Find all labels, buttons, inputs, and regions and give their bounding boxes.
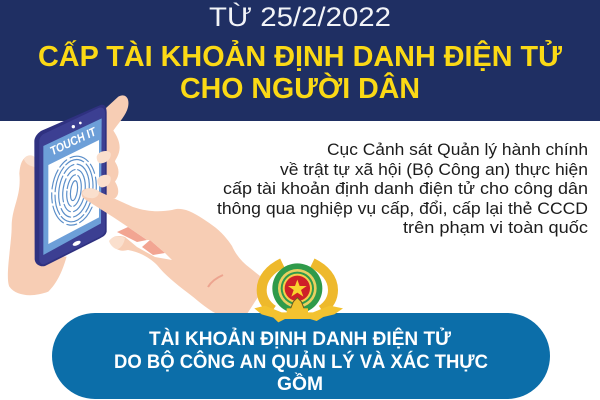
holding hand palm <box>8 155 67 295</box>
gold wheat wreath <box>262 263 333 310</box>
fingerprint <box>47 153 101 228</box>
date line: TỪ 25/2/2022 <box>209 2 391 32</box>
finger nails on far fingers <box>97 151 111 187</box>
gear base <box>290 298 305 310</box>
laurel band <box>278 269 317 308</box>
title <box>38 39 563 105</box>
title: CHO NGƯỜI DÂN <box>180 71 420 105</box>
pill text <box>114 326 488 395</box>
blue pill panel <box>52 313 550 399</box>
body text: về trật tự xã hội (Bộ Công an) thực hiện <box>280 160 588 179</box>
green ring <box>272 263 322 313</box>
body text: cấp tài khoản định danh điện tử cho công dân <box>223 179 588 198</box>
yellow ring <box>283 274 312 303</box>
body text: thông qua nghiệp vụ cấp, đổi, cấp lại thẻ CCCD <box>217 199 588 218</box>
illustration: pointing hand <box>82 188 260 314</box>
pill text: GỒM <box>277 371 323 395</box>
far fingers behind phone <box>97 95 128 198</box>
wrist crease <box>208 275 223 287</box>
body text: trên phạm vi toàn quốc <box>403 218 589 237</box>
red disc <box>285 276 310 301</box>
fingers behind <box>117 227 165 255</box>
body text <box>217 140 589 237</box>
illustration: hand holding phone <box>8 95 128 295</box>
pill text: DO BỘ CÔNG AN QUẢN LÝ VÀ XÁC THỰC <box>114 349 488 373</box>
title: CẤP TÀI KHOẢN ĐỊNH DANH ĐIỆN TỬ <box>38 39 563 73</box>
emblem <box>254 263 343 322</box>
hand shape <box>82 188 260 314</box>
star <box>288 280 307 297</box>
body text: Cục Cảnh sát Quản lý hành chính <box>327 140 588 159</box>
header band <box>0 0 600 121</box>
home button <box>72 240 81 247</box>
screen label: TOUCH IT <box>48 124 100 158</box>
phone <box>34 105 107 266</box>
pill text: TÀI KHOẢN ĐỊNH DANH ĐIỆN TỬ <box>149 326 452 350</box>
thumb nail <box>109 236 125 249</box>
phone screen <box>43 118 102 255</box>
fingertip nail <box>82 188 99 198</box>
phone body <box>34 105 107 266</box>
thumb nail <box>24 155 37 167</box>
camera dots <box>72 122 82 128</box>
ribbon <box>254 306 343 322</box>
